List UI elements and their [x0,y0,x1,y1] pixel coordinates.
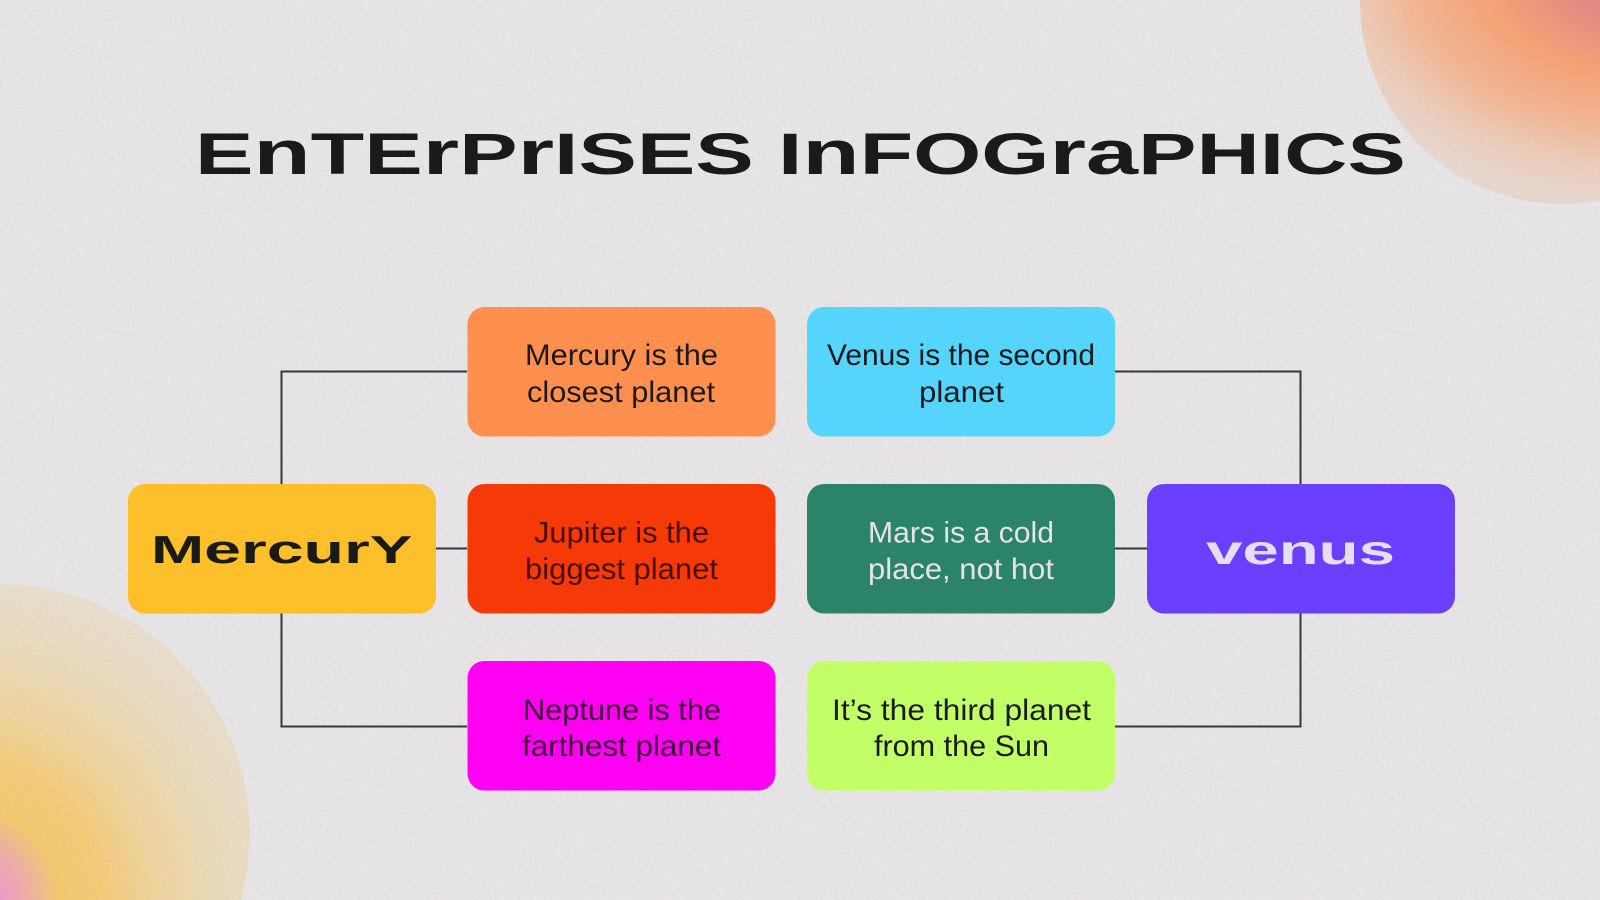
connectors: Mercury to left column [282,372,467,726]
card: Neptune: farthest planet [522,730,722,763]
card: Mars [807,484,1115,614]
card: Mercury [468,307,776,436]
card: Mars: Mars is a cold [868,516,1054,550]
decorative gradient circle: top right [1360,0,1600,204]
card: Jupiter: biggest planet [525,553,719,586]
card: Venus [807,307,1115,436]
card: Venus: planet [919,376,1005,409]
hub: Mercury [128,484,436,614]
card: Jupiter [468,484,776,614]
card: Mars: place, not hot [868,553,1055,586]
card: Venus: Venus is the second [827,339,1095,372]
connectors: Venus to right column [1115,372,1300,726]
card: Jupiter: Jupiter is the [534,516,709,550]
title: EnTErPrISES InFOGraPHICS [195,118,1406,187]
card: Neptune [468,661,776,790]
card: third planet [807,661,1115,790]
card: Neptune: Neptune is the [523,694,721,727]
card: Mercury: Mercury is the [525,339,718,372]
decorative gradient circle: bottom left [0,584,250,900]
hub: Venus [1147,484,1455,614]
card: third planet: from the Sun [874,730,1049,763]
hub: Mercury: MercurY [151,526,412,572]
card: Mercury: closest planet [527,376,716,409]
card: third planet: It’s the third planet [832,694,1092,727]
hub: Venus: venus [1206,527,1395,573]
